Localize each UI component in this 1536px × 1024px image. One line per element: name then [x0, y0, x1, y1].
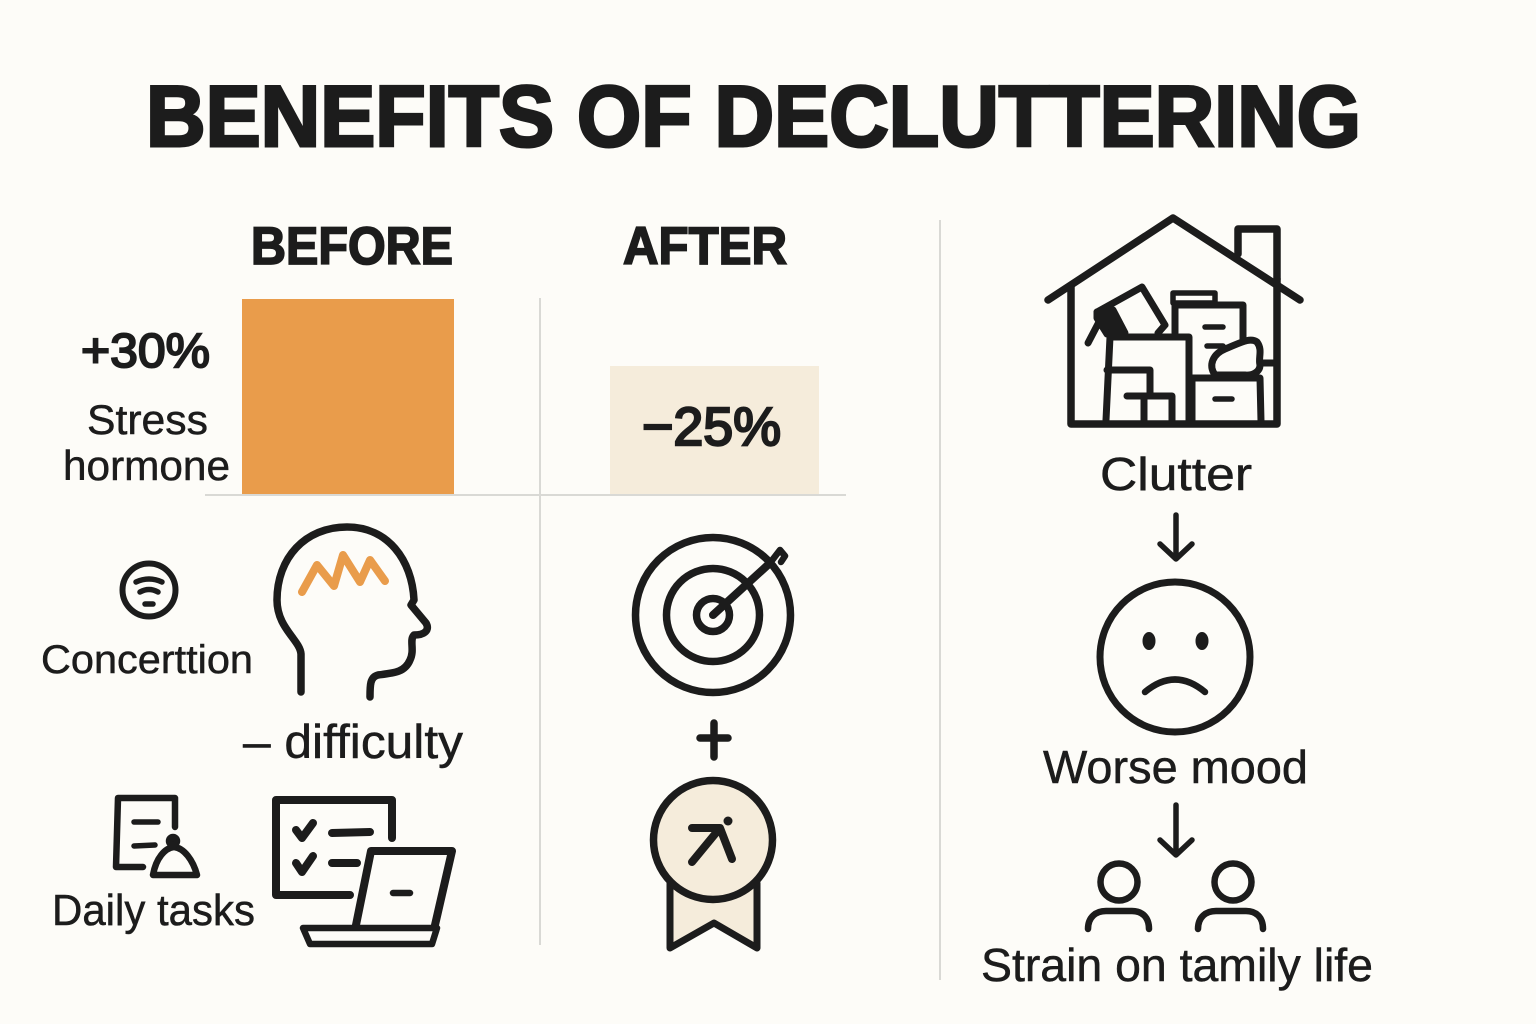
icon: sad face: [1100, 582, 1250, 732]
icon: document with bell: [116, 798, 197, 875]
label: daily tasks: Daily tasks: [52, 886, 255, 935]
icon: head with stress zigzag: [277, 527, 427, 697]
value: plus 30 percent: +30%: [81, 325, 210, 378]
bar: after stress hormone: [610, 366, 819, 494]
icon: target with arrow: [636, 538, 790, 692]
label: stress hormone: Stress: [87, 396, 208, 443]
icon: achievement medal: [654, 780, 772, 948]
panel: clutter consequence chain: [981, 218, 1373, 991]
icon: cluttered house: [1048, 218, 1300, 424]
heading: after: AFTER: [623, 217, 787, 276]
icon: checklist and laptop: [276, 800, 452, 944]
label: concentration: Concerttion: [41, 638, 253, 682]
medal disc: [654, 780, 772, 900]
ribbon: [670, 883, 757, 948]
icon: concentration signal: [122, 564, 176, 616]
icon: plus: [700, 723, 728, 757]
label: minus difficulty: – difficulty: [243, 715, 464, 768]
title: BENEFITS OF DECLUTTERING: [146, 69, 1361, 165]
label: stress hormone: hormone: [63, 442, 230, 489]
icon: two people: [1088, 864, 1263, 929]
zigzag: stress: [302, 555, 385, 592]
arrow: clutter to mood: [1160, 515, 1192, 559]
medal dot: [724, 816, 732, 826]
panel: before and after comparison: [41, 217, 819, 948]
heading: before: BEFORE: [251, 217, 453, 276]
value: minus 25 percent: −25%: [642, 397, 781, 457]
label: strain on family life: Strain on tamily life: [981, 939, 1373, 991]
label: clutter: Clutter: [1100, 448, 1252, 500]
medal arrow: [692, 828, 732, 862]
label: stress hormone: [63, 396, 230, 489]
bar: before stress hormone: [242, 299, 454, 494]
label: worse mood: Worse mood: [1043, 741, 1308, 793]
arrow: mood to family: [1160, 805, 1192, 855]
